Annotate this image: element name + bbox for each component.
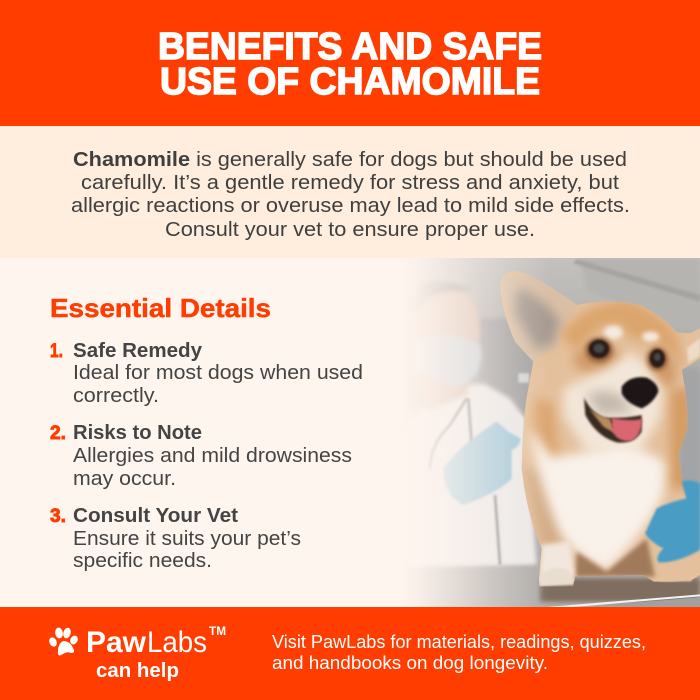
logo wordmark: TM: [209, 624, 226, 638]
logo wordmark: Labs: [147, 626, 207, 659]
vet in white coat: [425, 283, 539, 568]
item 1: [50, 339, 363, 407]
right ear: [687, 338, 700, 363]
eye shading: [573, 347, 623, 373]
tongue: [612, 418, 642, 441]
neck orange sides: [532, 395, 560, 462]
mask: [436, 336, 483, 386]
heading: Essential Details: [50, 293, 271, 323]
eye sockets: [585, 337, 613, 363]
intro panel: [0, 126, 700, 258]
vet glove: [443, 422, 521, 505]
table: [440, 565, 700, 607]
muzzle shade: [587, 391, 633, 415]
footer: [0, 607, 700, 700]
item 1: 1.: [50, 341, 63, 362]
eyes: [589, 340, 609, 358]
item 3: specific needs.: [73, 549, 212, 572]
intro text: Chamomile is generally safe for dogs but should be used: [73, 148, 627, 171]
blaze and cheeks: [563, 352, 663, 452]
intro text: carefully. It’s a gentle remedy for stress and anxiety, but: [81, 171, 619, 194]
title: [158, 26, 542, 103]
icon: paw: [48, 627, 79, 655]
item 2: Allergies and mild drowsiness: [73, 444, 352, 467]
photo: vet examining corgi: [400, 255, 700, 610]
panel: essential details background: [0, 258, 700, 607]
panel: essential details: [50, 293, 363, 572]
corgi: [497, 265, 700, 587]
item 2: 2.: [50, 423, 66, 444]
nose: [622, 377, 658, 408]
stethoscope: [430, 398, 500, 565]
mouth: [584, 398, 642, 443]
forehead orange: [560, 300, 683, 368]
fur silhouette: [497, 265, 700, 587]
hind paw: [660, 580, 692, 582]
handler blue glove: [645, 480, 700, 562]
item 3: Ensure it suits your pet’s: [73, 527, 301, 550]
item 1: Ideal for most dogs when used: [73, 361, 363, 384]
item 1: correctly.: [73, 384, 159, 407]
white chest: [528, 425, 665, 570]
header banner: [0, 0, 700, 126]
front leg: [540, 542, 575, 577]
photo background: [400, 255, 700, 610]
footer text: Visit PawLabs for materials, readings, quizzes,: [272, 631, 646, 652]
logo tagline: can help: [96, 660, 179, 682]
item 3: 3.: [50, 506, 66, 527]
intro text: allergic reactions or overuse may lead to mild side effects.: [71, 194, 630, 217]
intro text: [71, 148, 630, 241]
footer text: and handbooks on dog longevity.: [272, 652, 548, 673]
shadow between legs: [575, 538, 655, 577]
item 3: [50, 504, 301, 572]
logo wordmark: [86, 624, 226, 659]
footer text: [272, 631, 646, 673]
item 1: Safe Remedy: [73, 339, 203, 362]
fade overlay: [400, 258, 539, 607]
title: BENEFITS AND SAFE: [158, 26, 542, 68]
title: USE OF CHAMOMILE: [160, 61, 540, 103]
left ear inner: [508, 278, 574, 358]
intro text: Consult your vet to ensure proper use.: [165, 218, 535, 241]
item 2: [50, 421, 352, 490]
item 2: Risks to Note: [73, 421, 202, 444]
item 2: may occur.: [73, 467, 176, 490]
logo wordmark: Paw: [86, 626, 147, 659]
item 3: Consult Your Vet: [73, 504, 238, 527]
brow spots: [604, 326, 623, 339]
